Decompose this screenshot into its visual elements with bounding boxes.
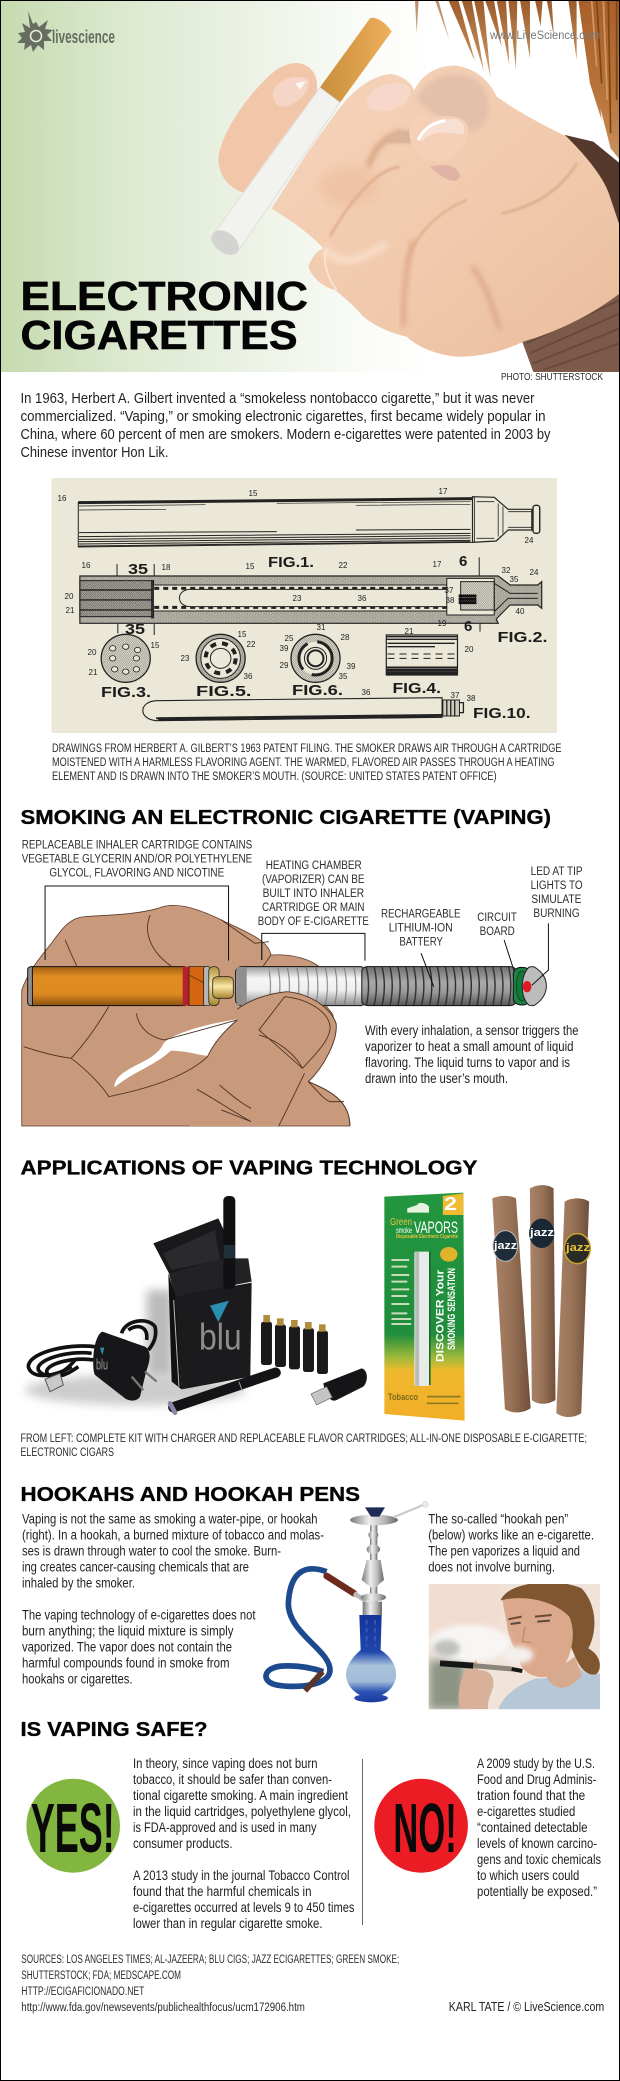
hookah pen text: The pen vaporizes a liquid and [428,1544,580,1558]
yes text: In theory, since vaping does not burn [133,1756,318,1771]
intro text: Chinese inventor Hon Lik. [20,445,168,461]
part numbers: 35 [510,575,519,584]
label: LED: LIGHTS TO [531,880,583,892]
sources [21,1954,399,2014]
figure 10 [143,698,463,721]
usb charger [323,1368,367,1401]
hookah pen text: does not involve burning. [428,1560,555,1574]
figure 2: cross-section [80,576,542,623]
patent caption: ELEMENT AND IS DRAWN INTO THE SMOKER’S MOUTH. (SOURCE: UNITED STATES PATENT OFFICE) [52,771,497,783]
label: battery [381,908,461,948]
part numbers: 21 [89,668,98,677]
pen in box [223,1196,235,1289]
hair [501,1582,600,1675]
part numbers: 20 [465,645,474,654]
hookah pen text: The so-called “hookah pen” [428,1512,568,1526]
label: LED: BURNING [533,908,580,920]
label: LED [531,866,583,920]
part numbers: 36 [362,688,371,697]
part numbers: 17 [433,560,442,569]
hookah text: Vaping is not the same as smoking a water-pipe, or hookah [22,1512,318,1526]
dimension marks [117,557,480,635]
logo: Live Science: livescience [52,27,115,47]
part numbers: 28 [341,633,350,642]
products caption [20,1433,587,1459]
hand [459,1660,494,1709]
vaping explanation text: drawn into the user’s mouth. [365,1071,508,1086]
label: LED: SIMULATE [531,894,582,906]
vaping explanation text: With every inhalation, a sensor triggers the [365,1023,578,1038]
part numbers: 15 [246,562,255,571]
heading: smoking an electronic cigarette: SMOKING AN ELECTRONIC CIGARETTE (VAPING) [20,807,551,829]
part numbers [58,487,539,703]
vaping explanation text: flavoring. The liquid turns to vapor and is [365,1055,570,1070]
figure labels: FIG.4. [392,680,441,697]
website url: www.LiveScience.com [489,30,600,42]
part numbers: 39 [280,644,289,653]
label: heating chamber [258,860,369,928]
part numbers: 36 [358,594,367,603]
yes text: is FDA-approved and is used in many [133,1820,317,1835]
hookah pen text: (below) works like an e-cigarette. [428,1528,594,1542]
cigar left [492,1196,531,1412]
card text: Tobacco [388,1392,418,1402]
figure 4 [386,635,457,675]
hookah text: ses is drawn through water to cool the smoke. Burn- [22,1544,281,1558]
part numbers: 25 [285,634,294,643]
part numbers: 23 [181,654,190,663]
face [503,1598,573,1677]
figure 3 [101,634,150,682]
figure labels: FIG.6. [292,682,343,699]
hookah illustration [266,1501,428,1702]
figure labels: FIG.5. [196,683,252,700]
figure labels: FIG.10. [473,705,530,722]
pen on table [173,1373,276,1407]
part numbers: 20 [88,648,97,657]
part numbers: 37 [445,586,454,595]
product photo: electronic cigars [492,1185,591,1417]
figure 5 [196,634,245,682]
sleeve [522,135,620,372]
part numbers: 15 [151,641,160,650]
part numbers: 22 [339,561,348,570]
label: inhaler cartridge: GLYCOL, FLAVORING AND NICOTINE [49,868,224,880]
figure labels: 6 [459,553,467,570]
figure labels: FIG.2. [498,629,548,646]
hookah text: vaporized. The vapor does not contain the [22,1640,232,1654]
part numbers: 38 [467,694,476,703]
part numbers: 19 [438,619,447,628]
hand illustration [22,905,350,1126]
hookah text: (right). In a hookah, a burned mixture of tobacco and molas- [22,1528,324,1542]
cigar bands text: jazz [529,1227,555,1239]
cigar bands text: jazz [493,1240,518,1252]
label: battery: LITHIUM-ION [389,922,453,934]
no text: Food and Drug Adminis- [477,1772,596,1787]
figure 1: full tube [78,497,540,547]
card text: Green [390,1217,412,1228]
label: inhaler cartridge [22,840,252,880]
no text: potentially be exposed.” [477,1884,597,1899]
title: ELECTRONIC [20,273,308,319]
figure labels: FIG.1. [268,554,314,571]
hookah text [22,1512,324,1686]
card text: DISCOVER Your [434,1269,446,1362]
badge: no [374,1779,468,1873]
product photo: green smoke disposable e-cigarette [384,1193,465,1421]
label: LED: LED AT TIP [531,866,583,878]
badge: yes: YES! [31,1789,115,1867]
no text: e-cigarettes studied [477,1804,575,1819]
part numbers: 32 [502,566,511,575]
charger [93,1332,150,1401]
part numbers: 16 [58,494,67,503]
label: circuit board: BOARD [480,926,515,938]
no text: to which users could [477,1868,579,1883]
logo: Live Science [17,11,115,52]
cigar bands text: jazz [565,1242,591,1254]
card text: SMOKING SENSATION [446,1268,458,1350]
hand gap [114,1019,237,1087]
hookah text: ing creates cancer-causing chemicals that are [22,1560,249,1574]
no text: levels of known carcino- [477,1836,597,1851]
no text: “contained detectable [477,1820,588,1835]
cartridges [261,1315,328,1374]
fingers and cigarette [207,18,620,357]
badge: no: NO! [393,1789,457,1867]
label: circuit board [477,912,517,938]
card text: smoke [396,1226,412,1235]
cigar middle [530,1185,556,1404]
leader lines [45,886,548,987]
part numbers: 21 [66,606,75,615]
figure labels [101,553,548,722]
mouthpieces [327,1576,354,1593]
smoke [430,1625,510,1662]
card text [388,1194,458,1402]
intro text: China, where 60 percent of men are smokers. Modern e-cigarettes were patented in 2003 by [20,427,551,443]
yes text: found that the harmful chemicals in [133,1884,312,1899]
hookah pen text [428,1512,594,1574]
cigarette cartridge [28,967,233,1006]
label: inhaler cartridge: VEGETABLE GLYCERIN AND/OR POLYETHYLENE [22,854,252,866]
hero photo: hand holding e-cigarette [0,0,620,372]
figure labels: FIG.3. [101,684,151,701]
cigar right [556,1198,589,1417]
hookah text: harmful compounds found in smoke from [22,1656,230,1670]
part numbers: 37 [451,691,460,700]
diagram: hand holding e-cigarette [22,886,548,1126]
part numbers: 18 [162,563,171,572]
thumb [115,992,336,1126]
part numbers: 29 [280,661,289,670]
diagram labels [22,840,583,948]
neck and shirt [498,1666,600,1710]
part numbers: 15 [238,630,247,639]
badge: yes [26,1779,120,1873]
part numbers: 24 [530,568,539,577]
label: battery: BATTERY [399,936,443,948]
label: battery: RECHARGEABLE [381,908,461,920]
card text: VAPORS [414,1218,458,1237]
card text: Disposable Electronic Cigarette [396,1234,458,1240]
stem [361,1523,386,1617]
part numbers: 23 [293,594,302,603]
hookah text: burn anything; the liquid mixture is simply [22,1624,234,1638]
sources: http://www.fda.gov/newsevents/publichealthfocus/ucm172906.htm [21,2002,305,2014]
hair [415,0,620,160]
vase [346,1615,396,1702]
icon: splat [17,11,53,52]
label: heating chamber: HEATING CHAMBER [266,860,362,872]
part numbers: 17 [439,487,448,496]
title: CIGARETTES [20,312,298,358]
part numbers: 21 [405,627,414,636]
label: heating chamber: (VAPORIZER) CAN BE [262,874,365,886]
part numbers: 38 [446,596,455,605]
photo: woman with hookah pen [429,1582,600,1710]
title [20,273,308,358]
products caption: ELECTRONIC CIGARS [20,1447,114,1459]
intro text: commercialized. “Vaping,” or smoking electronic cigarettes, first became widely popular in [20,409,546,425]
figure labels: 35 [125,621,145,638]
yes text: tobacco, it should be safer than conven- [133,1772,332,1787]
label: heating chamber: BUILT INTO INHALER [263,888,364,900]
card text: 2 [444,1194,457,1214]
intro text: In 1963, Herbert A. Gilbert invented a “smokeless nontobacco cigarette,” but it was never [20,391,535,407]
yes text: e-cigarettes occurred at levels 9 to 450 times [133,1900,355,1915]
yes text [133,1756,355,1931]
cigarette body [236,967,546,1006]
intro text [20,391,551,461]
part numbers: 36 [244,672,253,681]
figure labels: 35 [128,561,148,578]
part numbers: 40 [516,607,525,616]
yes text: A 2013 study in the journal Tobacco Control [133,1868,350,1883]
figure labels: 6 [464,618,472,635]
no text: tration found that the [477,1788,585,1803]
yes text: consumer products. [133,1836,232,1851]
part numbers: 22 [247,640,256,649]
tray and bowl [350,1515,398,1525]
part numbers: 39 [347,662,356,671]
part numbers: 24 [525,536,534,545]
hookah text: The vaping technology of e-cigarettes does not [22,1608,256,1622]
hose [266,1569,330,1686]
figure 6 [291,634,340,682]
sources: HTTP://ECIGAFICIONADO.NET [21,1986,144,1998]
product photo: blu complete kit: blu [96,1357,108,1373]
product photo: blu complete kit: blu [199,1316,242,1357]
heading: hookahs: HOOKAHS AND HOOKAH PENS [20,1484,360,1506]
yes text: in the liquid cartridges, polyethylene glycol, [133,1804,351,1819]
no text [477,1756,601,1899]
lid and box [153,1218,235,1297]
sources: SHUTTERSTOCK; FDA; MEDSCAPE.COM [21,1970,181,1982]
hookah text: hookahs or cigarettes. [22,1672,132,1686]
part numbers: 16 [82,561,91,570]
cable [28,1321,156,1377]
vaping explanation text [365,1023,578,1086]
label: circuit board: CIRCUIT [477,912,517,924]
cigar bands text [493,1227,591,1254]
part numbers: 31 [317,623,326,632]
panel: patent drawings [52,478,557,733]
label: inhaler cartridge: REPLACEABLE INHALER CARTRIDGE CONTAINS [22,840,252,852]
hookah text: inhaled by the smoker. [22,1576,135,1590]
label: heating chamber: CARTRIDGE OR MAIN [262,902,364,914]
product photo: blu complete kit [25,1196,367,1413]
vaping explanation text: vaporizer to heat a small amount of liquid [365,1039,574,1054]
part numbers: 35 [339,672,348,681]
pen [440,1663,473,1666]
yes text: lower than in regular cigarette smoke. [133,1916,322,1931]
part numbers: 20 [65,592,74,601]
yes text: tional cigarette smoking. A main ingredient [133,1788,348,1803]
part numbers: 15 [249,489,258,498]
heading: applications: APPLICATIONS OF VAPING TECHNOLOGY [20,1158,478,1180]
hand creases and nail [24,915,350,1126]
sources: SOURCES: LOS ANGELES TIMES; AL-JAZEERA; BLU CIGS; JAZZ ECIGARETTES; GREEN SMOKE; [21,1954,399,1966]
heading: is vaping safe: IS VAPING SAFE? [20,1719,208,1741]
patent caption [52,743,562,783]
label: heating chamber: BODY OF E-CIGARETTE [258,916,369,928]
